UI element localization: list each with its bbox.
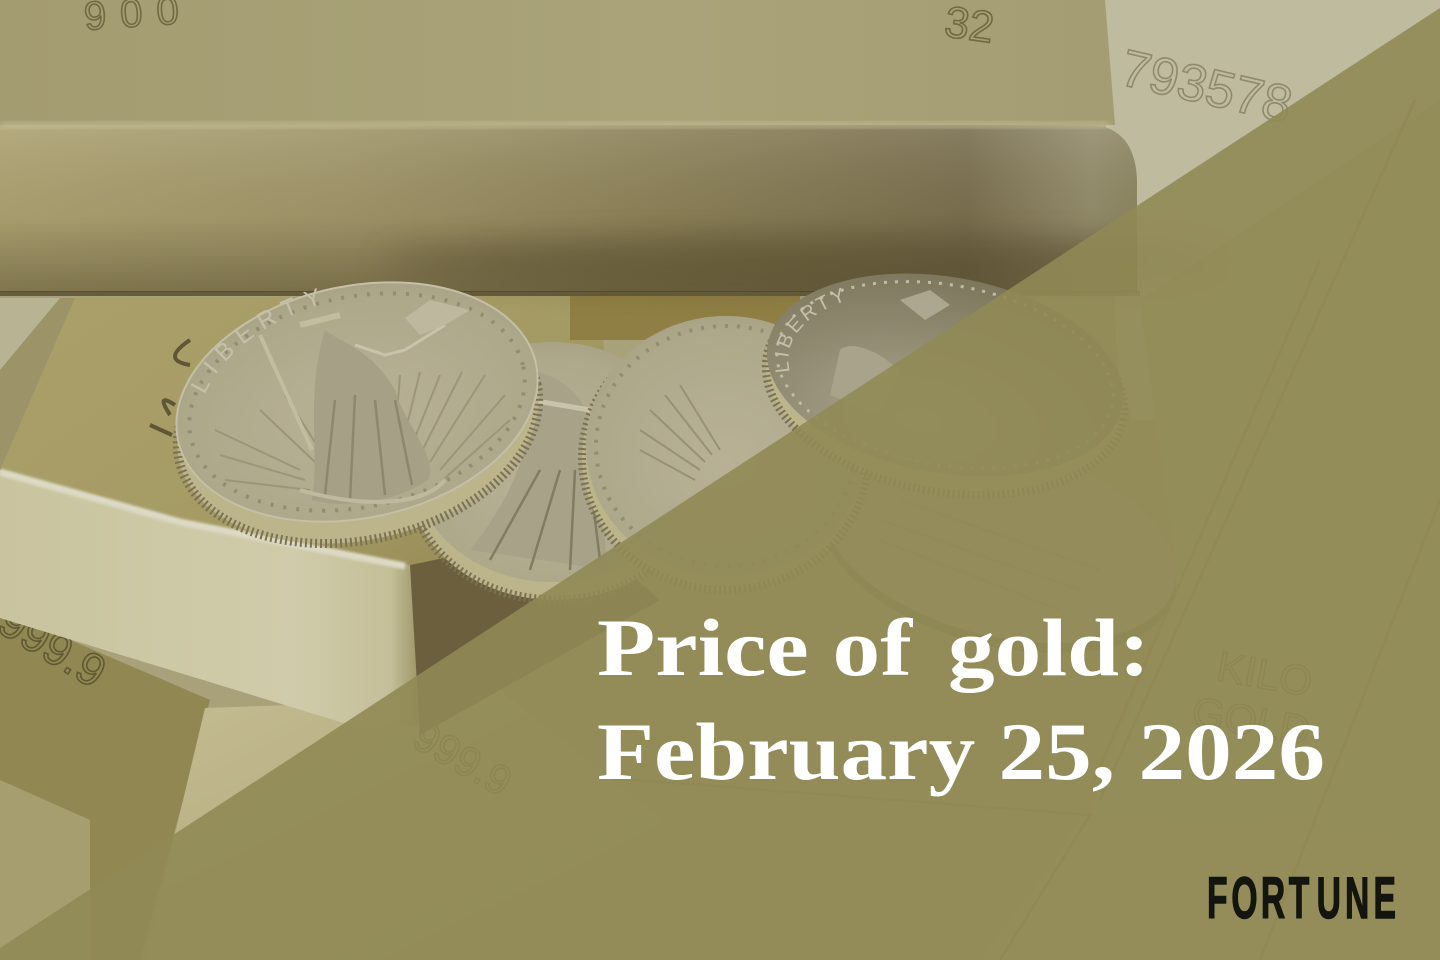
far right bar with serial number <box>1100 0 1440 420</box>
shadow under top bar <box>0 291 1140 296</box>
title: February 25, 2026 <box>597 706 1325 797</box>
coin: front left Liberty: LIBERTY <box>190 288 318 393</box>
coin: back right <box>803 407 1197 687</box>
Liberty figure <box>312 330 430 504</box>
right lower gold bars: GOLD <box>1188 688 1314 755</box>
lower left bars <box>0 594 700 960</box>
FORTUNE logo: FORTUNE <box>1207 867 1396 931</box>
coin: front left Liberty <box>172 281 544 548</box>
lower left bars: 999.9 <box>406 712 520 805</box>
far right bar with serial number: 793578 <box>1115 39 1297 135</box>
middle left bar <box>0 295 800 735</box>
coin: upper right: LIBERTY <box>774 288 842 372</box>
coin: centre behind <box>409 342 701 600</box>
title: gold: <box>948 602 1150 693</box>
coin rays <box>215 372 510 490</box>
coin: right of centre <box>582 316 868 590</box>
title: Price of <box>597 602 914 693</box>
right lower gold bars <box>505 100 1440 960</box>
top gold bar <box>0 0 1220 292</box>
coin: upper right <box>762 274 1008 431</box>
title <box>597 602 1325 797</box>
right lower gold bars: KILO <box>1213 643 1316 705</box>
